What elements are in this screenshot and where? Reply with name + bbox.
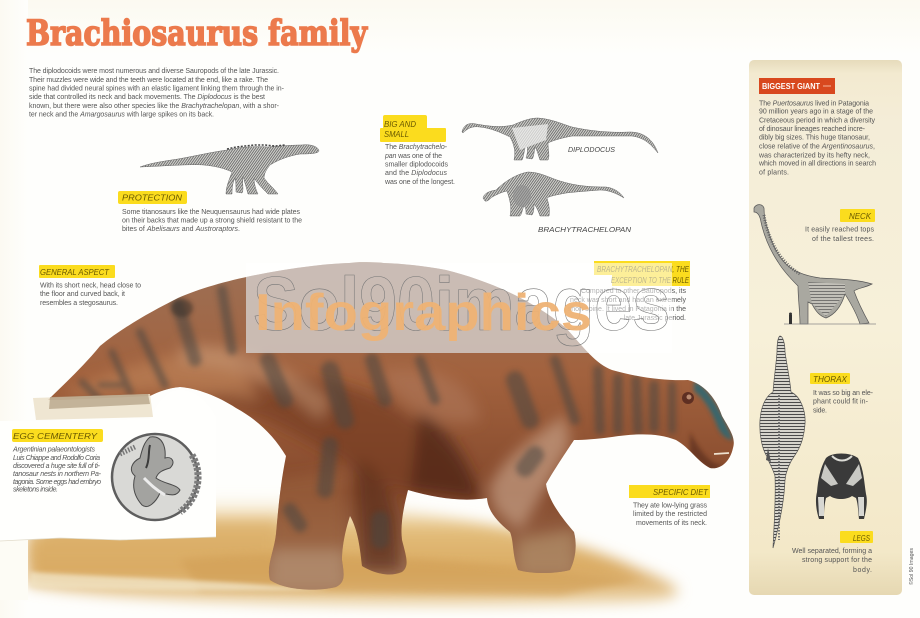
- text: thorax: It was so big an ele-: [813, 390, 874, 397]
- label: big and small: [380, 115, 446, 142]
- text: egg cementery: tanosaur nests in northern Pa-: [13, 471, 102, 478]
- text: biggest giant: close relative of the Argentinosaurus,: [759, 144, 875, 150]
- text: egg cementery: discovered a huge site full of ti-: [13, 463, 101, 470]
- intro text: [29, 68, 285, 118]
- text: big and small: pan was one of the: [384, 153, 442, 160]
- heading: biggest giant: BIGGEST GIANT: [762, 81, 821, 91]
- text: thorax: phant could fit in-: [813, 398, 869, 406]
- text: egg cementery: [12, 446, 102, 494]
- eye: [682, 392, 694, 404]
- blue head crest: [694, 381, 733, 440]
- body shading: [60, 344, 575, 590]
- text: general aspect: resembles a stegosaurus.: [40, 300, 118, 307]
- text: protection: [122, 209, 302, 233]
- sketch: top view skeleton: [760, 336, 805, 548]
- label: general aspect: GENERAL ASPECT: [40, 268, 110, 277]
- sketch: front view: [816, 454, 867, 519]
- label: brachytrachelopan exception: [594, 261, 690, 286]
- text: specific diet: They ate low-lying grass: [633, 502, 708, 510]
- sketch: diplodocus: [462, 118, 658, 160]
- intro text: spine had divided neural spines with an elastic ligament linking them through the in-: [29, 86, 285, 92]
- text: protection: bites of Abelisaurs and Austroraptors.: [122, 226, 240, 233]
- credit: ©Sol 90 Images: [908, 548, 915, 585]
- text: thorax: side.: [813, 408, 827, 414]
- label: protection: PROTECTION: [122, 194, 182, 202]
- label: neck: NECK: [849, 212, 872, 221]
- label: neck: [840, 209, 875, 222]
- intro text: The diplodocoids were most numerous and diverse Sauropods of the late Jurassic.: [29, 68, 279, 75]
- text: biggest giant: which moved in all directions in search: [758, 160, 876, 168]
- label: egg cementery: [12, 429, 103, 442]
- label: thorax: THORAX: [813, 375, 848, 384]
- text: protection: on their backs that made up a strong shield resistant to the: [122, 218, 302, 224]
- panel: biggest giant: [749, 60, 902, 595]
- text: neck: [805, 226, 874, 243]
- mouth and teeth: [714, 453, 729, 454]
- intro text: Their muzzles were wide and the teeth were located at the end, like a rake. The: [29, 77, 268, 84]
- text: specific diet: movements of its neck.: [636, 520, 707, 527]
- text: biggest giant: of plants.: [759, 170, 789, 176]
- text: neck: It easily reached tops: [805, 226, 874, 234]
- text: specific diet: limited by the restricted: [633, 511, 707, 518]
- text: brachytrachelopan exception: neck was short and had an extremely: [570, 297, 686, 304]
- text: biggest giant: Cretaceous period in which a diversity: [759, 118, 876, 124]
- watermark: Infographics: [255, 284, 592, 342]
- intro text: known, but there were also other species like the Brachytrachelopan, with a shor-: [29, 103, 280, 110]
- text: biggest giant: dibly big sizes. This huge titanosaur,: [759, 134, 870, 142]
- watermark: Sol90images: [253, 262, 670, 347]
- text: legs: strong support for the: [802, 557, 872, 564]
- label: legs: [840, 531, 873, 543]
- text: general aspect: the floor and curved back, it: [40, 291, 125, 298]
- tape: [33, 394, 153, 420]
- text: biggest giant: The Puertosaurus lived in Patagonia: [759, 100, 869, 108]
- sketch: neuquensaurus: [140, 145, 319, 194]
- text: big and small: smaller diplodocoids: [385, 162, 448, 168]
- sketch: puertasaurus: [754, 205, 876, 324]
- label: legs: LEGS: [853, 534, 871, 543]
- text: egg cementery: Luis Chiappe and Rodolfo Coria: [13, 455, 100, 462]
- label: brachytrachelopan exception: EXCEPTION TO THE RULE: [611, 276, 690, 285]
- text: biggest giant: 90 million years ago in a stage of the: [759, 108, 873, 116]
- body tone beneath watermark panel: [246, 262, 588, 353]
- text: thorax: [813, 390, 874, 414]
- text: general aspect: [40, 282, 141, 307]
- label: protection: [118, 191, 187, 204]
- label: egg cementery: EGG CEMENTERY: [13, 432, 98, 441]
- text: egg cementery: skeletons inside.: [13, 486, 58, 494]
- text: legs: body.: [853, 567, 872, 574]
- label: big and small: SMALL: [384, 130, 409, 139]
- label: specific diet: [629, 485, 710, 498]
- text: brachytrachelopan exception: Compared to other Sauropods, its: [581, 288, 686, 295]
- paper note: egg cementery: [0, 390, 216, 541]
- text: brachytrachelopan exception: late Jurassic period.: [624, 315, 686, 322]
- text: big and small: The Brachytrachelo-: [385, 144, 448, 151]
- grey-blue mottled stripes: [82, 290, 672, 540]
- text: biggest giant: was characterized by its hefty neck,: [758, 152, 870, 160]
- label: specific diet: SPECIFIC DIET: [653, 488, 709, 497]
- text: specific diet: [633, 502, 708, 527]
- dark back spot: [171, 299, 193, 317]
- label: brachytrachelopan: BRACHYTRACHELOPAN: [538, 227, 632, 234]
- ground: sand: [0, 496, 678, 606]
- text: biggest giant: [758, 100, 876, 176]
- label: general aspect: [39, 265, 115, 278]
- text: big and small: [384, 144, 455, 186]
- text: protection: Some titanosaurs like the Neuquensaurus had wide plates: [122, 209, 300, 216]
- text: big and small: and the Diplodocus: [385, 170, 448, 177]
- torn paper: [0, 390, 216, 541]
- title: Brachiosaurus family: [26, 13, 368, 54]
- illustration: dinosaur: [40, 255, 740, 595]
- text: neck: of the tallest trees.: [812, 236, 874, 243]
- text: big and small: was one of the longest.: [384, 179, 455, 186]
- text: legs: [792, 548, 872, 574]
- label: brachytrachelopan exception: BRACHYTRACHELOPAN, THE: [597, 265, 690, 274]
- text: biggest giant: of dinosaur lineages reached incre-: [759, 126, 866, 133]
- icon: embryo in egg: [112, 434, 198, 520]
- intro text: ter neck and the Amargosaurus with large spikes on its back.: [29, 112, 214, 118]
- text: egg cementery: Argentinian palaeontologists: [12, 446, 96, 454]
- text: brachytrachelopan exception: short spine. It lived in Patagonia in the: [568, 306, 686, 313]
- text: egg cementery: tagonia. Some eggs had embryo: [13, 479, 101, 486]
- text: legs: Well separated, forming a: [792, 548, 872, 555]
- text: brachytrachelopan exception: [568, 288, 686, 322]
- heading: biggest giant: [759, 78, 835, 94]
- intro text: side that controlled its neck and back movements. The Diplodocus is the best: [29, 94, 265, 101]
- sketch: brachytrachelopan: [483, 172, 624, 216]
- label: diplodocus: DIPLODOCUS: [568, 147, 615, 154]
- label: thorax: [810, 373, 850, 384]
- text: general aspect: With its short neck, head close to: [40, 282, 141, 290]
- label: big and small: BIG AND: [384, 120, 416, 129]
